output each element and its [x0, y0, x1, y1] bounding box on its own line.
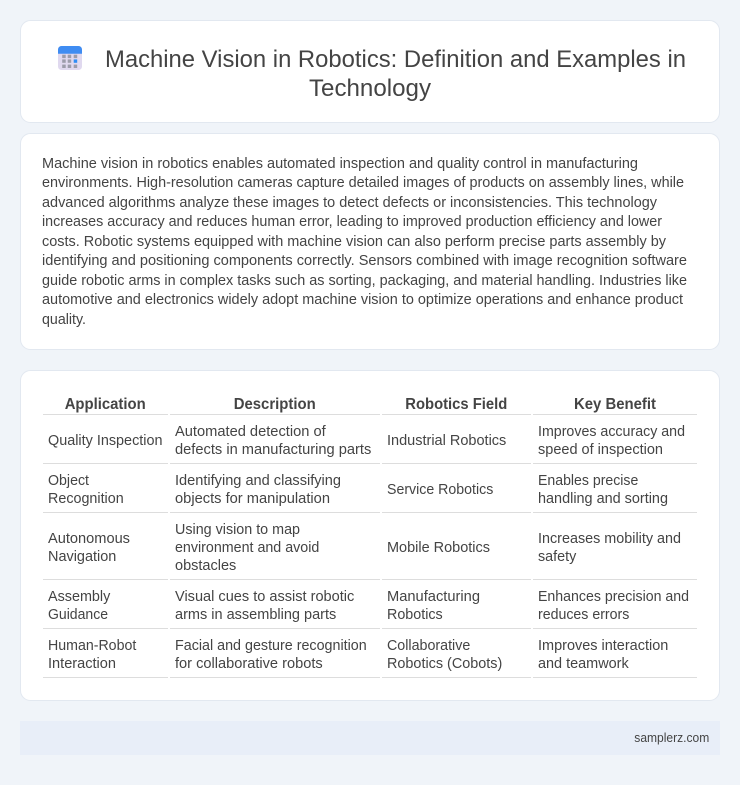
table row: object recognition: Identifying and classifying: [175, 473, 341, 489]
table header row: Description: [234, 396, 316, 413]
table header row: Robotics Field: [405, 396, 507, 413]
text block: description: costs. Robotic systems equipped with machine vision can also perform precise parts assembly by: [42, 234, 667, 250]
table row: assembly guidance: [43, 589, 697, 629]
table row: human-robot interaction: Facial and gesture recognition: [175, 638, 367, 654]
panel: intro paragraph: [20, 134, 720, 350]
panel: applications table: [20, 370, 720, 700]
table row: autonomous navigation: Using vision to map: [175, 522, 300, 538]
table row: quality inspection: Improves accuracy and: [538, 424, 685, 440]
table row: autonomous navigation: obstacles: [175, 558, 236, 574]
table row: assembly guidance: Enhances precision and: [538, 589, 689, 605]
text block: description: advanced algorithms analyze these images to detect defects or inconsistencies. This technology: [42, 195, 658, 211]
table header row: Key Benefit: [574, 396, 657, 413]
text block: description: increases accuracy and reduces human error, leading to improved production efficiency and lower: [42, 214, 662, 230]
table row: quality inspection: Industrial Robotics: [387, 433, 506, 449]
table row: assembly guidance: Robotics: [387, 607, 443, 623]
table row: assembly guidance: Assembly: [48, 589, 111, 605]
title: Machine Vision in Robotics: Definition and Examples in: [105, 46, 686, 73]
table row: assembly guidance: reduces errors: [538, 607, 629, 623]
table row: quality inspection: speed of inspection: [538, 442, 663, 458]
table row: object recognition: Enables precise: [538, 473, 638, 489]
table row: autonomous navigation: safety: [538, 549, 577, 565]
table row: human-robot interaction: for collaborative robots: [175, 656, 323, 672]
table row: autonomous navigation: Mobile Robotics: [387, 540, 490, 556]
table row: human-robot interaction: Collaborative: [387, 638, 470, 654]
table row: object recognition: objects for manipulation: [175, 491, 330, 507]
text block: description: guide robotic arms in complex tasks such as sorting, packaging, and material handling. Industries like: [42, 273, 687, 289]
text block: description: identifying and positioning components correctly. Sensors combined with image recognition software: [42, 253, 687, 269]
table row: object recognition: Service Robotics: [387, 482, 493, 498]
table row: assembly guidance: Visual cues to assist robotic: [175, 589, 354, 605]
panel: title card: [20, 20, 720, 122]
table row: quality inspection: defects in manufacturing parts: [175, 442, 371, 458]
table row: autonomous navigation: Increases mobility and: [538, 531, 681, 547]
table row: quality inspection: Automated detection of: [175, 424, 327, 440]
icon: calendar grid: [58, 46, 82, 70]
table header row: [43, 396, 697, 415]
table row: assembly guidance: arms in assembling parts: [175, 607, 336, 623]
text block: description: automotive and electronics widely adopt machine vision to optimize operations and enhance product: [42, 292, 683, 308]
table row: object recognition: Recognition: [48, 491, 124, 507]
table row: quality inspection: [43, 424, 697, 464]
table row: autonomous navigation: Navigation: [48, 549, 116, 565]
table row: human-robot interaction: Human-Robot: [48, 638, 136, 654]
table row: human-robot interaction: and teamwork: [538, 656, 630, 672]
footer bar: [20, 721, 720, 755]
title: [105, 46, 686, 102]
title: Technology: [309, 75, 431, 102]
table row: human-robot interaction: Improves interaction: [538, 638, 668, 654]
table row: object recognition: handling and sorting: [538, 491, 668, 507]
table row: quality inspection: Quality Inspection: [48, 433, 162, 449]
table header row: Application: [65, 396, 146, 413]
table row: human-robot interaction: [43, 638, 697, 678]
text block: description: [42, 156, 687, 328]
table row: assembly guidance: Guidance: [48, 607, 108, 623]
text block: description: environments. High-resolution cameras capture detailed images of products on assembly lines, while: [42, 175, 684, 191]
table row: human-robot interaction: Interaction: [48, 656, 116, 672]
table row: human-robot interaction: Robotics (Cobots): [387, 656, 502, 672]
table row: object recognition: Object: [48, 473, 89, 489]
table row: autonomous navigation: Autonomous: [48, 531, 130, 547]
text block: description: quality.: [42, 312, 86, 328]
table row: assembly guidance: Manufacturing: [387, 589, 480, 605]
table row: autonomous navigation: environment and avoid: [175, 540, 319, 556]
table row: autonomous navigation: [43, 522, 697, 580]
table row: object recognition: [43, 473, 697, 513]
footer credit: samplerz.com: [634, 730, 709, 745]
text block: description: Machine vision in robotics enables automated inspection and quality control in manufacturing: [42, 156, 638, 172]
